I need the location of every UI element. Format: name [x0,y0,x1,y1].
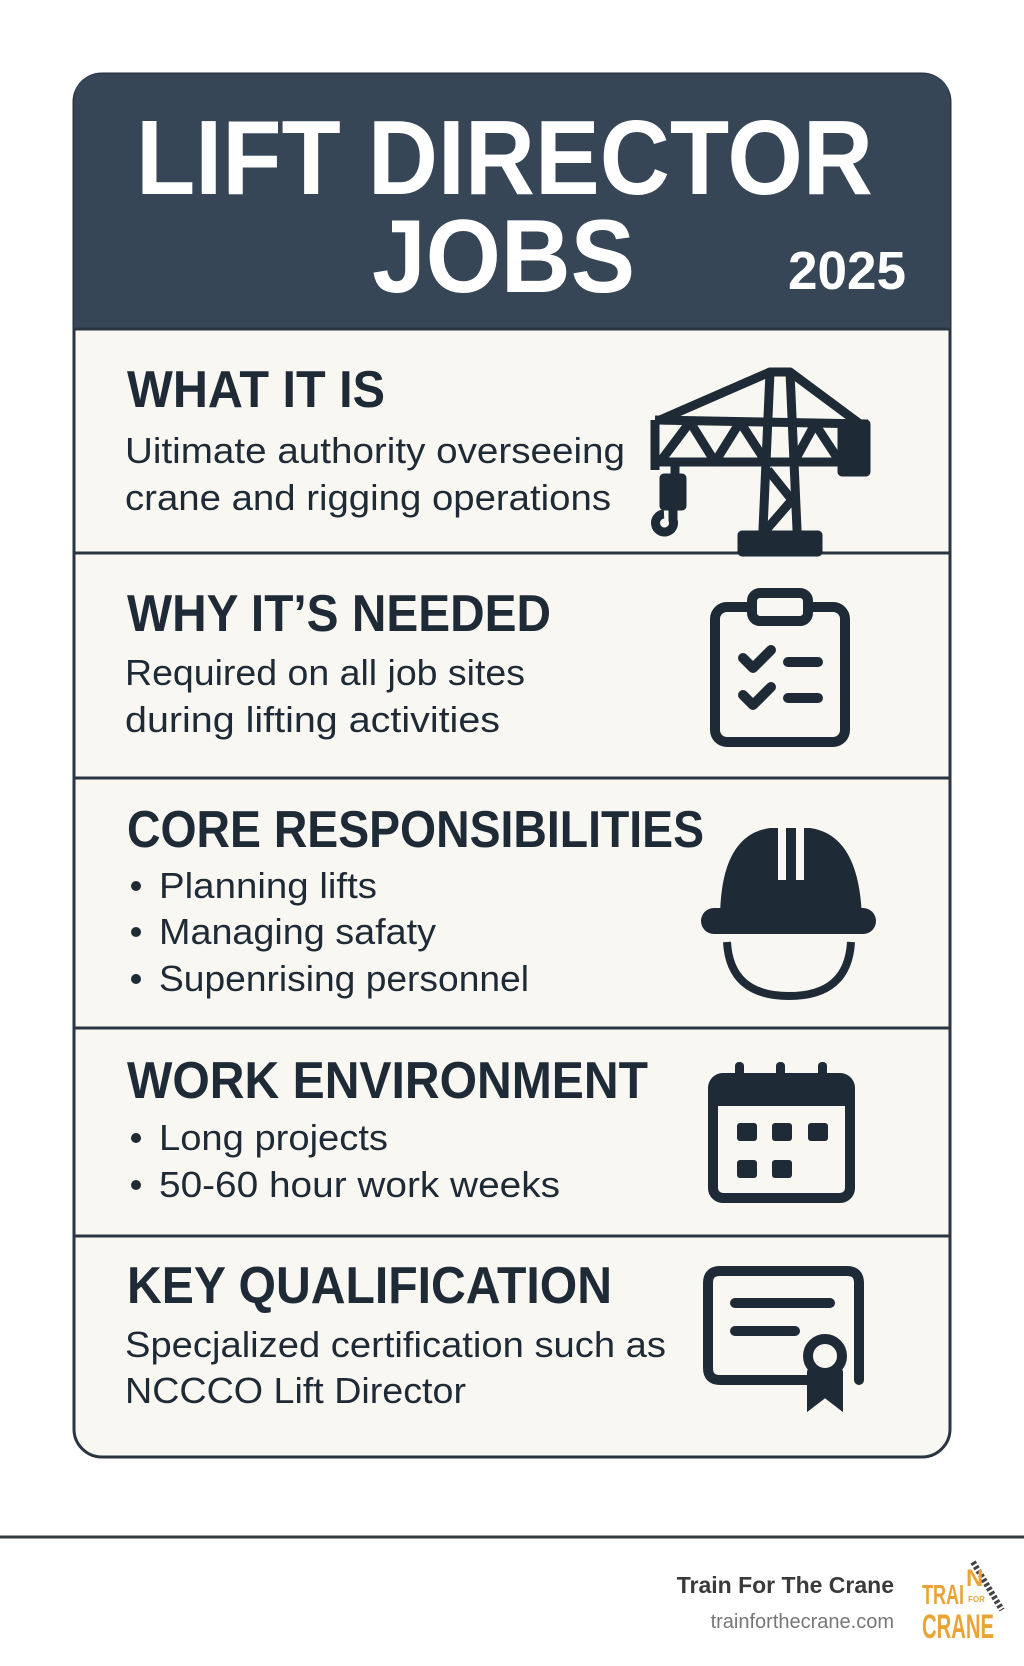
panel: work environment [127,1052,648,1205]
panel: what it is: Uitimate authority overseeing [125,430,625,471]
panel: key qualification [125,1257,666,1411]
logo: TRAI [922,1579,964,1610]
panel: what it is [125,361,625,518]
card [74,74,950,1457]
logo: N [966,1565,983,1592]
panel: core responsibilities: CORE RESPONSIBILITIES [127,801,704,859]
title: LIFT DIRECTOR [136,99,873,217]
icon: clipboard [715,593,845,742]
panel: what it is: crane and rigging operations [125,477,611,518]
panel: why it's needed: during lifting activities [125,699,500,740]
icon: certificate [708,1271,859,1402]
footer divider [0,1536,1024,1538]
panel: what it is: WHAT IT IS [127,361,385,419]
panel: core responsibilities [127,801,704,999]
panel: key qualification: NCCCO Lift Director [125,1370,466,1411]
logo: FOR [968,1595,985,1604]
panel: work environment: Long projects [159,1117,388,1158]
title [136,99,906,315]
logo [922,1562,1002,1646]
footer: brand text: Train For The Crane [677,1572,894,1598]
title: JOBS [372,199,635,315]
icon: hard hat [701,822,876,996]
panel: work environment: 50-60 hour work weeks [159,1164,560,1205]
panel: core responsibilities: Planning lifts [159,865,377,906]
panel: why it's needed: WHY IT’S NEEDED [127,585,551,643]
icon: calendar [713,1062,850,1198]
panel: core responsibilities: Managing safaty [159,911,436,952]
panel: key qualification: KEY QUALIFICATION [127,1257,612,1315]
icon: crane [655,372,868,552]
panel: why it's needed: Required on all job sites [125,652,525,693]
header band [74,74,950,329]
panel: work environment: WORK ENVIRONMENT [127,1052,648,1110]
panel: why it's needed [125,585,551,740]
year: 2025 [788,241,906,301]
panel: core responsibilities: Supenrising personnel [159,958,529,999]
footer: brand text: trainforthecrane.com [711,1611,894,1633]
footer: brand text [677,1572,894,1633]
panel: key qualification: Specjalized certification such as [125,1324,666,1365]
